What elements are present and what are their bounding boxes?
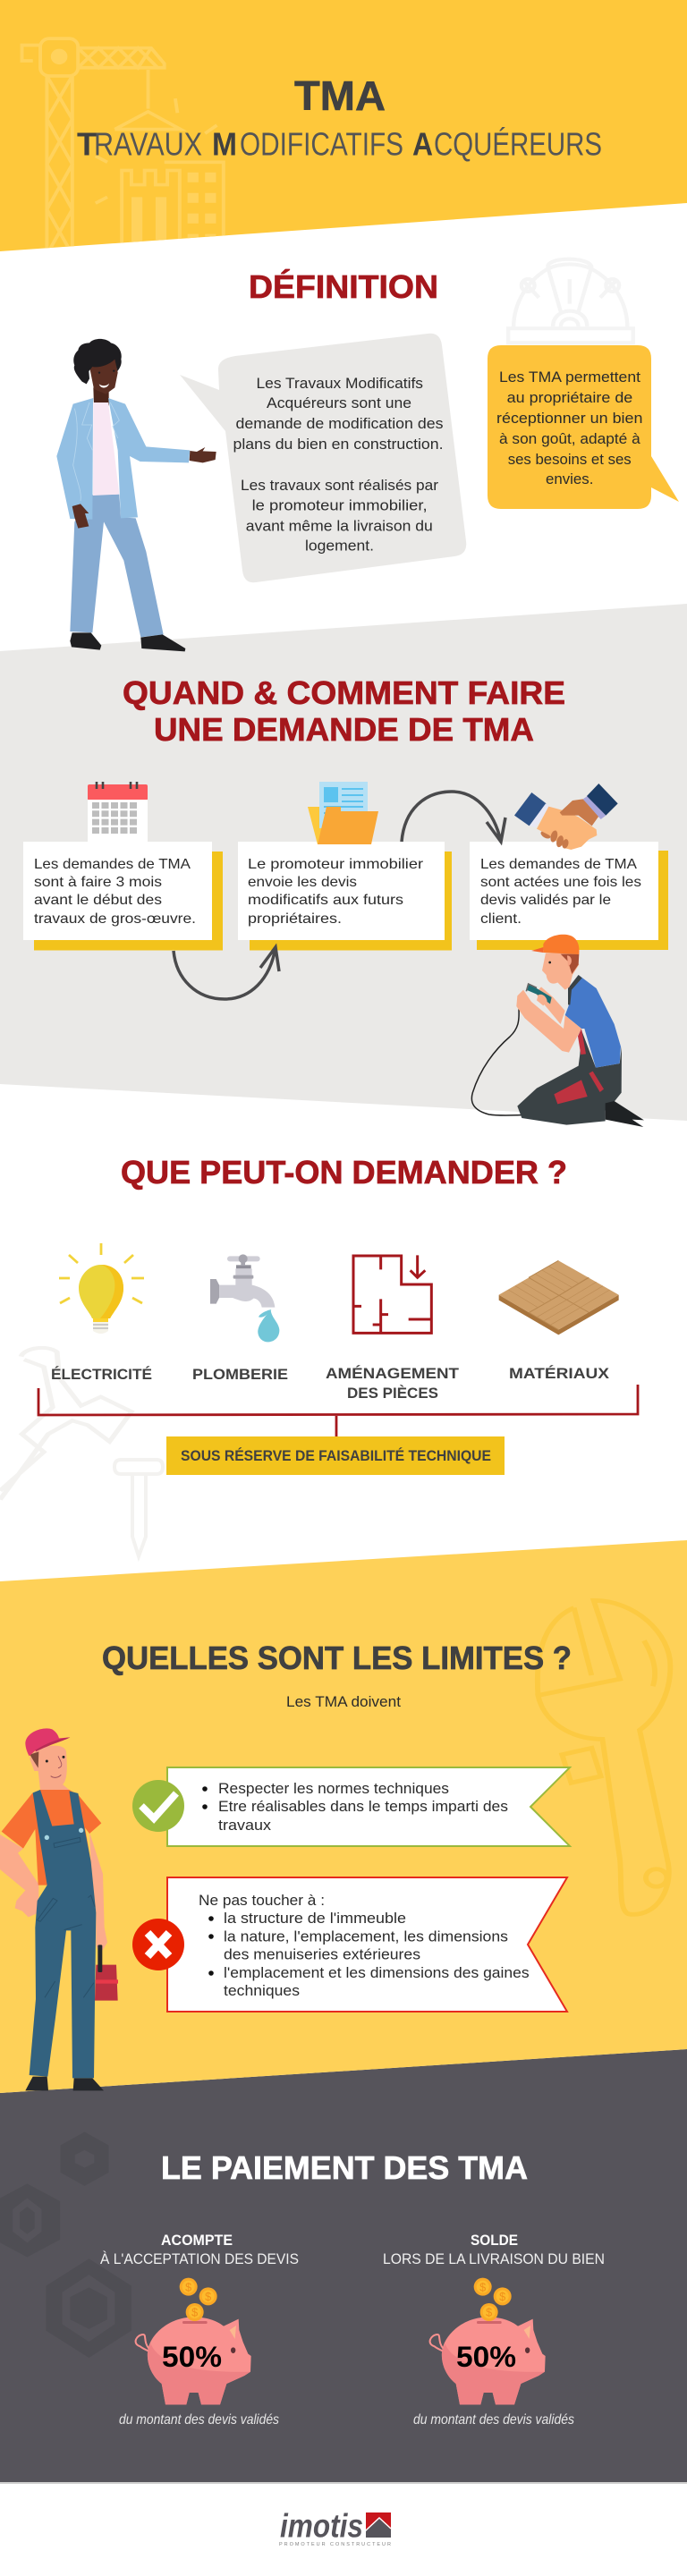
illustration: worker in overalls: [0, 1728, 118, 2090]
ribbon: forbidden: techniques: [224, 1982, 300, 1999]
watermark: hex nuts: [0, 2132, 131, 2358]
speech bubble: definition: Acquéreurs sont une: [267, 394, 411, 411]
speech bubble: benefit: à son goût, adapté à: [499, 430, 640, 447]
subtitle: ODIFICATIFS: [240, 125, 403, 163]
logo: imotis: PROMOTEUR CONSTRUCTEUR: [279, 2542, 391, 2547]
card 1: Les demandes de TMA: [34, 857, 191, 872]
icon: faucet: [210, 1254, 279, 1342]
callout: feasibility: [166, 1436, 505, 1475]
card 3: sont actées une fois les: [480, 875, 641, 890]
speech bubble: definition: Les Travaux Modificatifs: [256, 375, 423, 392]
ribbon: forbidden: [167, 1877, 567, 2012]
heading: paiement: LE PAIEMENT DES TMA: [161, 2149, 528, 2186]
card 3: Les demandes de TMA: [480, 857, 637, 872]
speech bubble: definition: le promoteur immobilier,: [252, 497, 428, 514]
card 3: devis validés par le: [480, 893, 611, 908]
card 1: avant le début des: [34, 893, 162, 908]
heading: que peut-on demander: QUE PEUT-ON DEMANDER ?: [121, 1154, 567, 1191]
panel: header: [0, 0, 687, 263]
card 2: propriétaires.: [248, 911, 342, 927]
labels: categories: [51, 1365, 610, 1402]
icon: piggy bank acompte: $: [205, 2291, 211, 2303]
caption: solde: du montant des devis validés: [413, 2412, 574, 2428]
icon: piggy bank solde: $: [499, 2291, 505, 2303]
icon: parquet: [499, 1260, 619, 1335]
speech bubble: benefit: au propriétaire de: [507, 389, 632, 406]
icon: piggy bank solde: [430, 2278, 546, 2404]
title: TMA: TMA: [294, 72, 386, 119]
card 2: modificatifs aux futurs: [248, 893, 403, 908]
value: 50% solde: 50%: [456, 2341, 516, 2373]
card 1: [23, 842, 223, 950]
card 1: sont à faire 3 mois: [34, 875, 162, 890]
card 2: Le promoteur immobilier: [248, 857, 424, 872]
panel: paiement: [0, 2132, 605, 2428]
speech bubble: benefit: envies.: [546, 470, 593, 487]
column heading: solde: LORS DE LA LIVRAISON DU BIEN: [383, 2250, 605, 2267]
ribbon: forbidden: Ne pas toucher à :: [199, 1892, 325, 1909]
subtitle: A: [412, 125, 433, 163]
ribbon: forbidden: l'emplacement et les dimensions des gaines: [224, 1964, 530, 1981]
panel: payment background: [0, 2049, 687, 2482]
icon: handshake: [514, 784, 618, 850]
ribbon: allowed: Respecter les normes techniques: [218, 1780, 449, 1797]
speech bubble: definition: plans du bien en construction.: [233, 436, 444, 453]
card 3: client.: [480, 911, 522, 927]
limits band: [0, 1540, 687, 2093]
header band: [0, 0, 687, 251]
bracket: [38, 1385, 638, 1436]
icon: check badge: [132, 1780, 184, 1832]
icon: cross badge: [132, 1919, 184, 1970]
ribbon: forbidden: la nature, l'emplacement, les dimensions: [224, 1928, 508, 1945]
labels: categories: ÉLECTRICITÉ: [51, 1366, 152, 1383]
subtitle: T: [77, 125, 97, 163]
card 1: travaux de gros-œuvre.: [34, 911, 196, 927]
heading: quand et comment: [123, 674, 565, 748]
icon: piggy bank solde: $: [486, 2307, 492, 2319]
callout: feasibility: SOUS RÉSERVE DE FAISABILITÉ TECHNIQUE: [181, 1447, 491, 1464]
caption: acompte: du montant des devis validés: [119, 2412, 279, 2428]
panel: quand et comment background: [0, 604, 687, 1121]
icon: crane watermark: [21, 38, 224, 263]
panel: quand et comment: [23, 674, 668, 1127]
ribbon: allowed: [167, 1767, 570, 1846]
watermark: spanner: [538, 1600, 670, 1914]
card 3: [470, 842, 668, 950]
panel: definition: [56, 259, 679, 651]
labels: categories: MATÉRIAUX: [509, 1365, 610, 1382]
speech bubble: benefit: Les TMA permettent: [499, 369, 640, 386]
heading: limites: QUELLES SONT LES LIMITES ?: [102, 1640, 572, 1676]
subtitle: RAVAUX: [94, 125, 202, 163]
speech bubble: definition: logement.: [305, 538, 374, 555]
panel: limites: [0, 1540, 687, 2093]
icon: floor plan: [353, 1255, 431, 1333]
speech bubble: definition: avant même la livraison du: [246, 518, 433, 535]
icon: light bulb: [59, 1243, 144, 1334]
icon: calendar: [88, 782, 148, 842]
panel: que peut-on demander: [0, 1154, 638, 1556]
ribbon: forbidden: la structure de l'immeuble: [224, 1910, 406, 1927]
heading: définition: DÉFINITION: [249, 268, 438, 305]
card 2: envoie les devis: [248, 875, 357, 890]
speech bubble: benefit: [488, 345, 679, 509]
icon: piggy bank acompte: $: [185, 2281, 191, 2293]
icon: piggy bank solde: $: [479, 2281, 486, 2293]
icon: helmet watermark: [508, 259, 633, 343]
subtitle: CQUÉREURS: [434, 125, 602, 163]
column heading: solde: SOLDE: [471, 2232, 518, 2249]
subtitle: M: [212, 125, 237, 163]
labels: categories: DES PIÈCES: [347, 1385, 438, 1402]
icon: piggy bank acompte: [136, 2278, 251, 2404]
labels: categories: PLOMBERIE: [192, 1366, 288, 1383]
speech bubble: definition: Les travaux sont réalisés par: [241, 477, 438, 494]
speech bubble: benefit: réceptionner un bien: [496, 410, 642, 427]
heading: quand et comment: QUAND & COMMENT FAIRE: [123, 674, 565, 711]
arrow: card 1 to card 2: [174, 947, 279, 999]
column heading: acompte: À L'ACCEPTATION DES DEVIS: [100, 2250, 299, 2267]
column heading: solde: [383, 2232, 605, 2267]
speech bubble: benefit: ses besoins et ses: [508, 451, 632, 468]
icon: folder with document: [308, 782, 378, 844]
ribbon: allowed: travaux: [218, 1817, 272, 1834]
text: intro: Les TMA doivent: [286, 1693, 401, 1710]
card 2: [238, 842, 452, 950]
speech bubble: definition: demande de modification des: [236, 415, 444, 432]
arrow: card 2 to card 3: [402, 792, 505, 842]
column heading: acompte: ACOMPTE: [161, 2232, 233, 2249]
ribbon: allowed: Etre réalisables dans le temps imparti des: [218, 1798, 508, 1815]
column heading: acompte: [100, 2232, 299, 2267]
icon: piggy bank acompte: $: [191, 2307, 198, 2319]
illustration: electrician: [471, 935, 644, 1127]
watermark: pipe wrench: [0, 1348, 131, 1500]
logo: imotis: imotis: [280, 2508, 363, 2544]
watermark: nail: [114, 1460, 163, 1556]
ribbon: forbidden: des menuiseries extérieures: [224, 1946, 420, 1963]
speech bubble: definition: [180, 334, 466, 582]
value: 50% acompte: 50%: [162, 2341, 222, 2373]
labels: categories: AMÉNAGEMENT: [326, 1365, 460, 1382]
illustration: man presenting: [56, 339, 216, 651]
heading: quand et comment: UNE DEMANDE DE TMA: [154, 711, 534, 748]
